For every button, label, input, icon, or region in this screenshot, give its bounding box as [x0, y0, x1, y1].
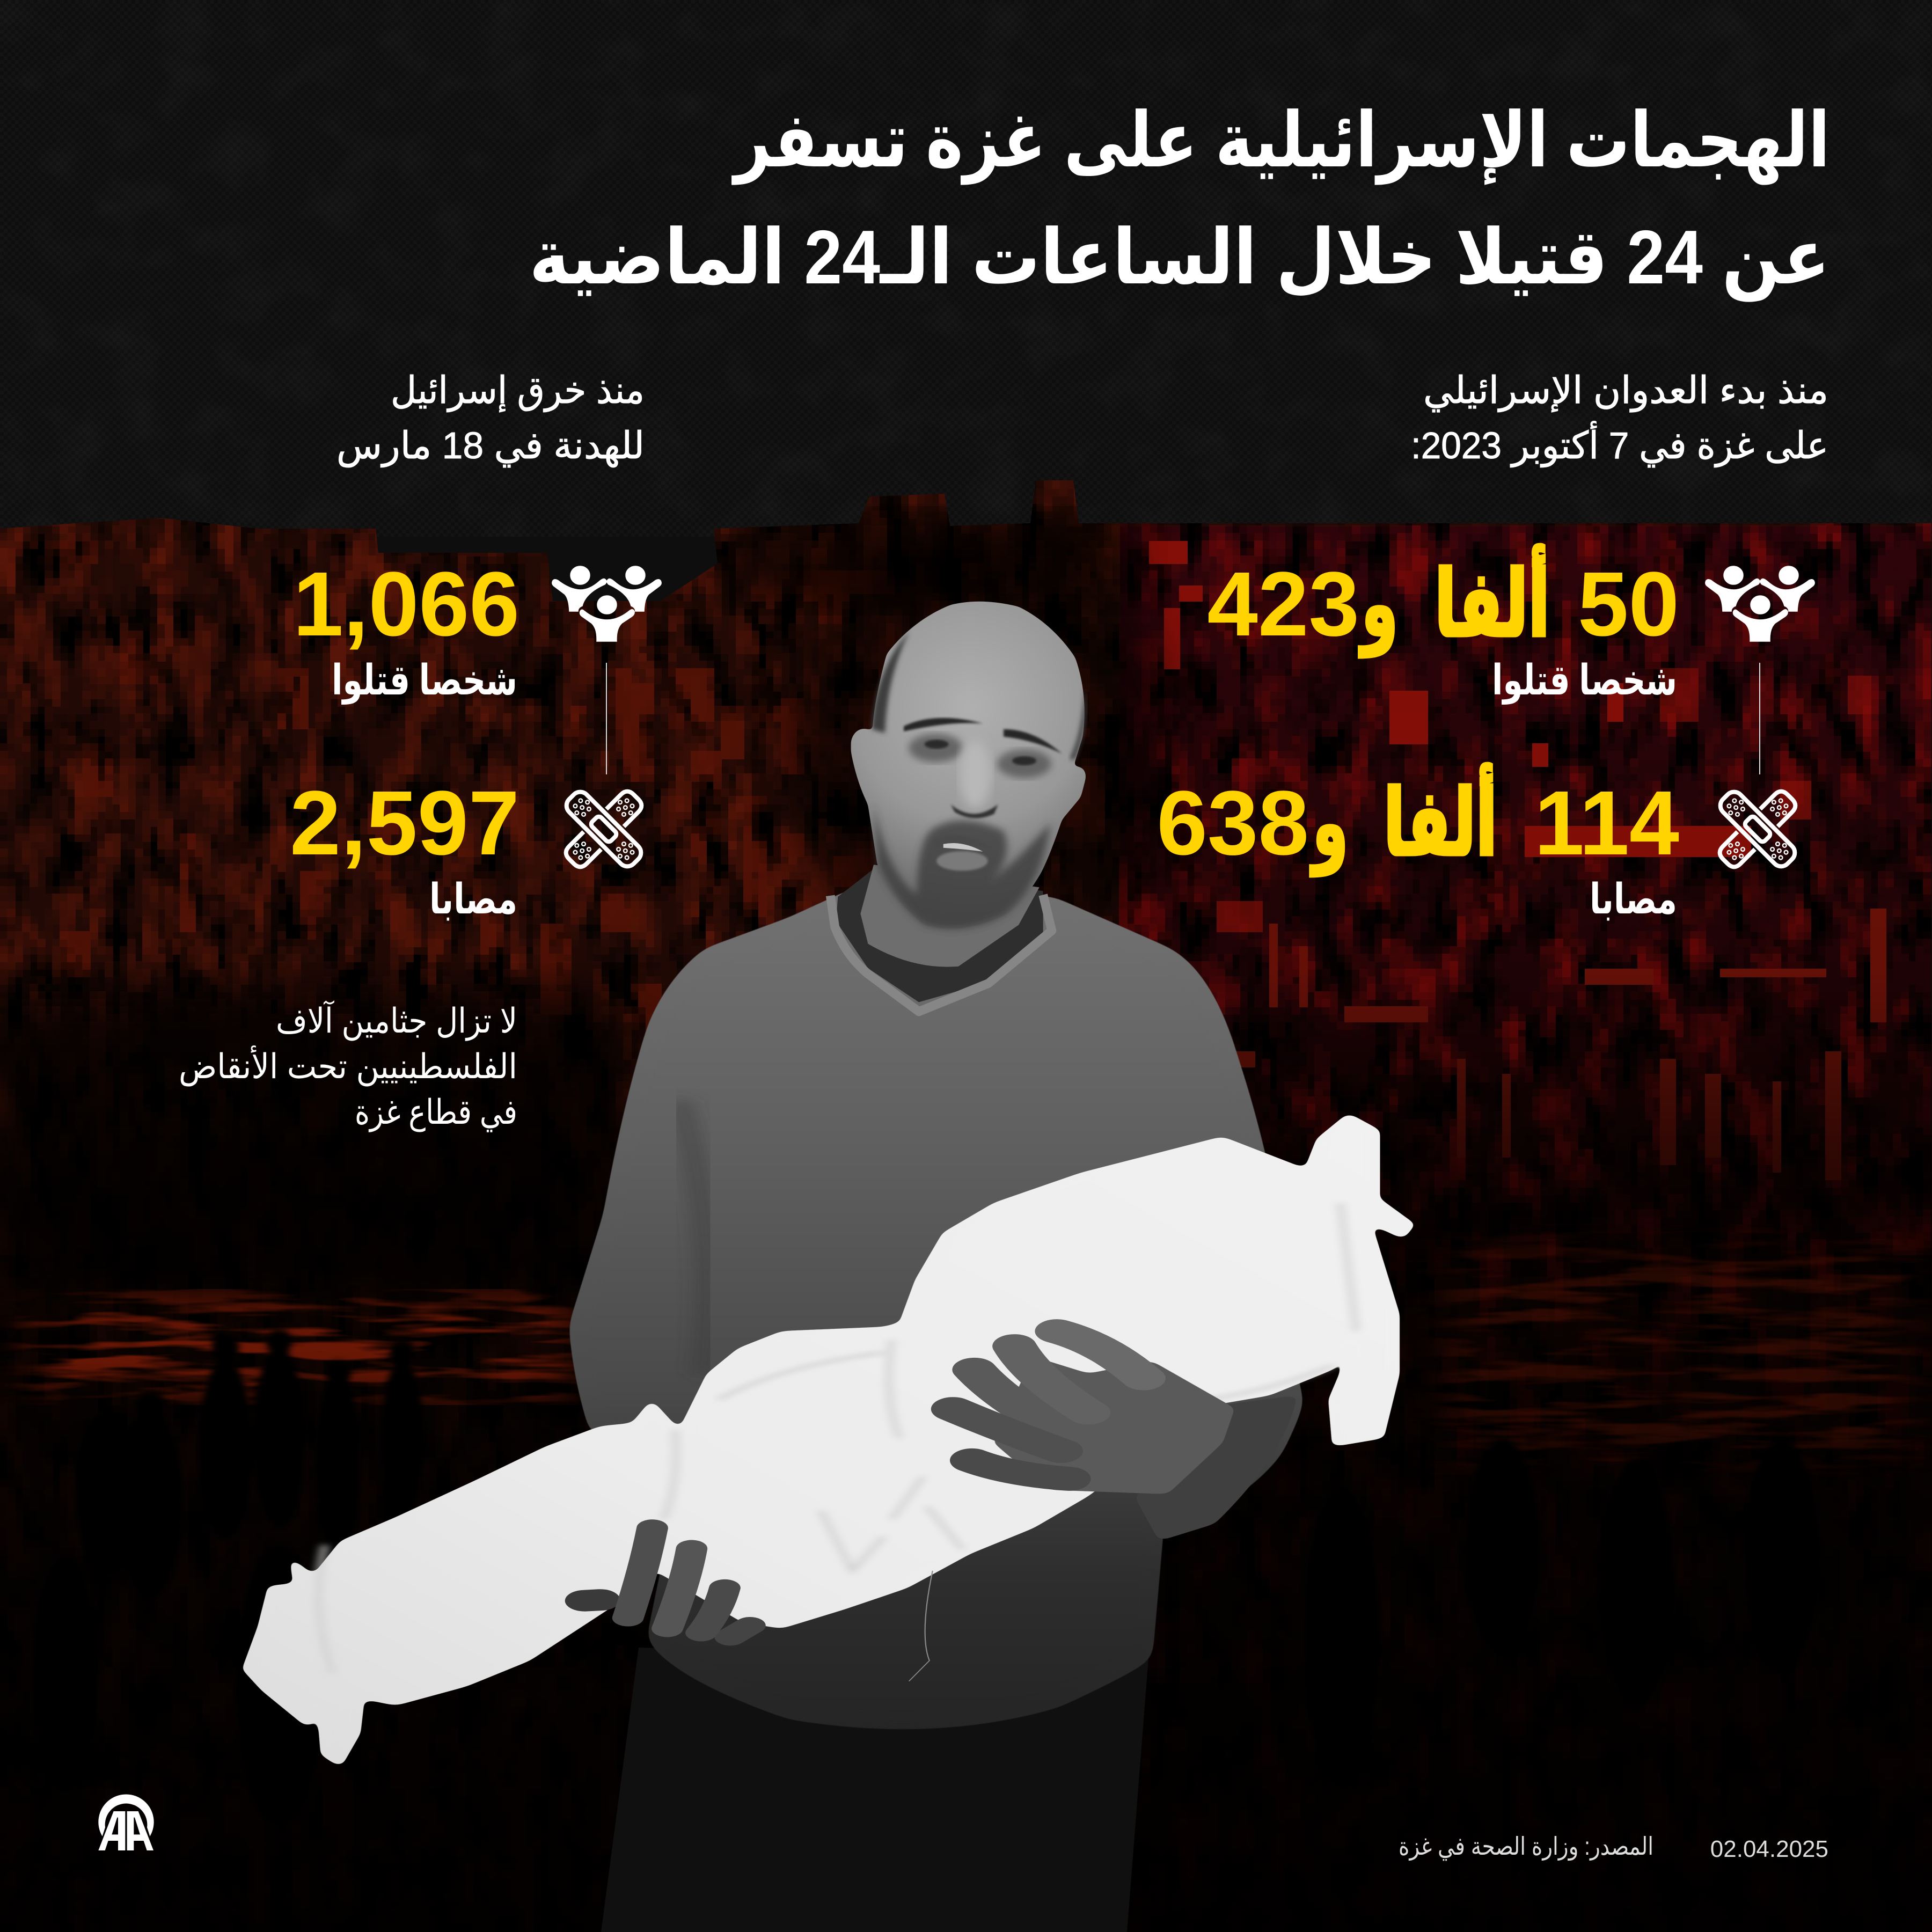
stat: injured total: و: [1309, 772, 1349, 877]
background: ruined buildings tinted red: [0, 480, 1932, 1932]
stat: injured total: 638: [1157, 772, 1309, 874]
stat: killed total: [1207, 545, 1679, 658]
icon: people: [552, 566, 661, 641]
subheading line 1: منذ بدء العدوان الإسرائيلي: [1423, 369, 1828, 413]
title: [529, 98, 1830, 302]
stat: injured since March: 2,597: [290, 772, 519, 874]
subheading: since 7 October: [1411, 369, 1828, 468]
label: killed: شخصا قتلوا: [1492, 656, 1677, 705]
shroud folds: [319, 1203, 1356, 1673]
face details: [872, 631, 1086, 929]
child shroud: [242, 1113, 1415, 1768]
note line 3: في قطاع غزة: [355, 1093, 517, 1132]
man: neck and collar: [830, 602, 1086, 1012]
icon: bandage: [1717, 788, 1798, 870]
label: injured: مصابا: [429, 875, 517, 923]
note line 2: الفلسطينيين تحت الأنقاض: [179, 1045, 517, 1087]
man: right hand: [953, 1331, 1234, 1494]
man: sweater: [569, 890, 1304, 1729]
stat: injured total: 114: [1534, 772, 1679, 874]
stat: killed total: ألفا: [1435, 545, 1550, 655]
subheading line 2: للهدنة في 18 مارس: [336, 425, 645, 468]
title line 2: عن 24 قتيلا خلال الساعات الـ24 الماضية: [529, 215, 1830, 302]
stat: killed total: و: [1358, 553, 1399, 658]
photo: man carrying shrouded child: [242, 602, 1415, 1932]
sweater: sleeve shading: [679, 1100, 707, 1374]
stat: killed total: 50: [1578, 553, 1679, 655]
man: head: [851, 602, 1086, 929]
stat: killed total: 423: [1207, 553, 1359, 655]
stat: injured total: ألفا: [1384, 764, 1497, 874]
divider: [606, 663, 607, 774]
footer: date: 02.04.2025: [1710, 1836, 1828, 1862]
stat: injured total: [1157, 764, 1679, 877]
man: right sleeve: [1136, 1395, 1297, 1541]
subheading: since 18 March: [336, 369, 645, 468]
label: killed: شخصا قتلوا: [332, 656, 517, 705]
icon: bandage: [563, 788, 645, 870]
divider: [1759, 663, 1760, 774]
label: injured: مصابا: [1590, 875, 1677, 923]
subheading line 1: منذ خرق إسرائيل: [391, 369, 645, 413]
logo: AA: [98, 1794, 154, 1850]
note line 1: لا تزال جثامين آلاف: [276, 1000, 517, 1041]
man: trousers: [601, 1648, 1148, 1932]
man: left hand: [584, 1528, 750, 1637]
footer: source: المصدر: وزارة الصحة في غزة: [1399, 1832, 1653, 1861]
stat: killed since March: 1,066: [293, 553, 519, 655]
panel: totals since 18 March: [290, 553, 661, 923]
shroud loose thread: [909, 1571, 933, 1681]
subheading line 2: على غزة في 7 أكتوبر 2023:: [1411, 421, 1828, 468]
icon: people: [1706, 566, 1814, 641]
panel: totals since 7 October: [1157, 545, 1814, 923]
note: bodies under rubble: [179, 1000, 517, 1132]
